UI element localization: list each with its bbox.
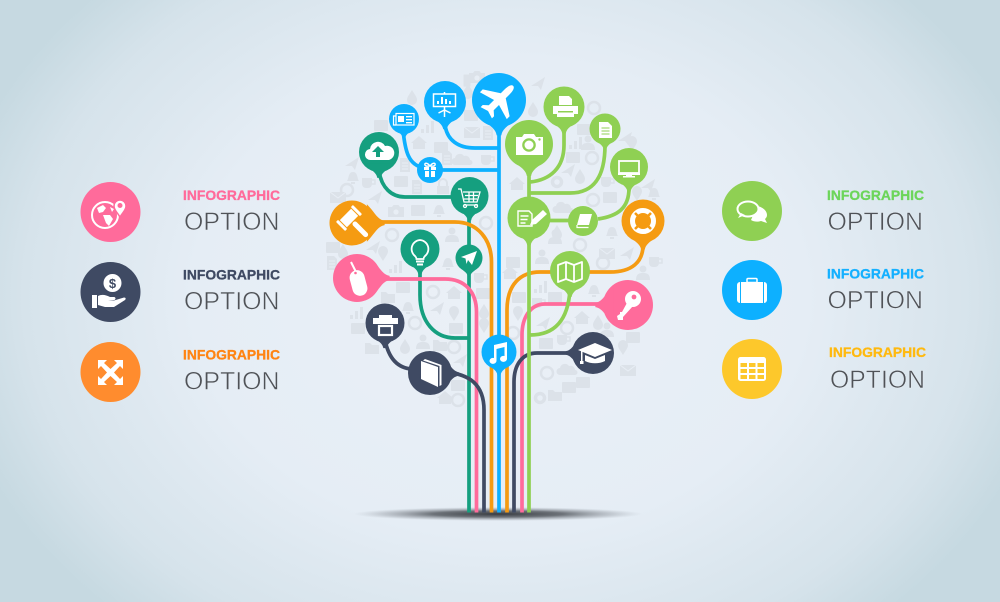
option: globe xyxy=(80,182,140,242)
pin: graduation cap xyxy=(566,332,614,374)
option heading 5: INFOGRAPHIC xyxy=(827,266,924,282)
pin: airplane xyxy=(472,72,527,135)
option: expand arrows xyxy=(80,342,140,402)
pin: paper plane xyxy=(456,244,482,276)
option label 1: OPTION xyxy=(184,208,280,236)
pin: music note xyxy=(482,334,516,375)
pin: lifebuoy xyxy=(622,200,664,250)
orange branches xyxy=(375,222,643,512)
background icon cloud xyxy=(326,71,662,406)
option label 6: OPTION xyxy=(830,366,925,394)
option: table grid xyxy=(722,339,782,399)
pin: gift xyxy=(417,157,443,183)
pin: monitor xyxy=(610,148,648,191)
option: suitcase xyxy=(722,260,782,320)
option label 3: OPTION xyxy=(184,368,280,396)
pin: book navy xyxy=(407,351,459,395)
pin: key xyxy=(595,280,653,330)
blue branches xyxy=(403,125,499,512)
pin: document xyxy=(590,114,620,149)
tree branches xyxy=(375,125,643,512)
pin: cloud upload xyxy=(359,132,399,178)
option heading 1: INFOGRAPHIC xyxy=(183,187,280,203)
pin: small book xyxy=(568,206,598,236)
navy branches xyxy=(385,340,570,512)
option heading 6: INFOGRAPHIC xyxy=(829,344,926,360)
option heading 2: INFOGRAPHIC xyxy=(183,266,280,282)
option heading 3: INFOGRAPHIC xyxy=(183,346,280,362)
option heading 4: INFOGRAPHIC xyxy=(827,187,924,203)
pin: presentation chart xyxy=(424,81,466,129)
pin: lightbulb xyxy=(400,230,440,274)
pin: printer navy xyxy=(366,304,404,348)
option: hand with coin xyxy=(80,262,140,322)
pin: camera xyxy=(505,120,553,176)
pin: shopping cart xyxy=(450,177,488,220)
option: speech bubbles xyxy=(722,181,782,241)
green branches xyxy=(529,128,629,512)
pin: printer green xyxy=(544,86,584,134)
teal branches xyxy=(379,170,469,512)
ground shadow xyxy=(353,507,643,521)
pin: map xyxy=(550,251,590,297)
option label 2: OPTION xyxy=(184,288,280,316)
pin: gavel xyxy=(330,200,385,246)
option label 5: OPTION xyxy=(828,286,923,314)
option label 4: OPTION xyxy=(828,208,923,236)
pin: edit document xyxy=(508,196,550,245)
pin: price tag xyxy=(333,254,390,302)
pin: newspaper xyxy=(389,104,419,138)
option: hand with coin: $ xyxy=(109,276,117,291)
pink branches xyxy=(380,279,600,512)
